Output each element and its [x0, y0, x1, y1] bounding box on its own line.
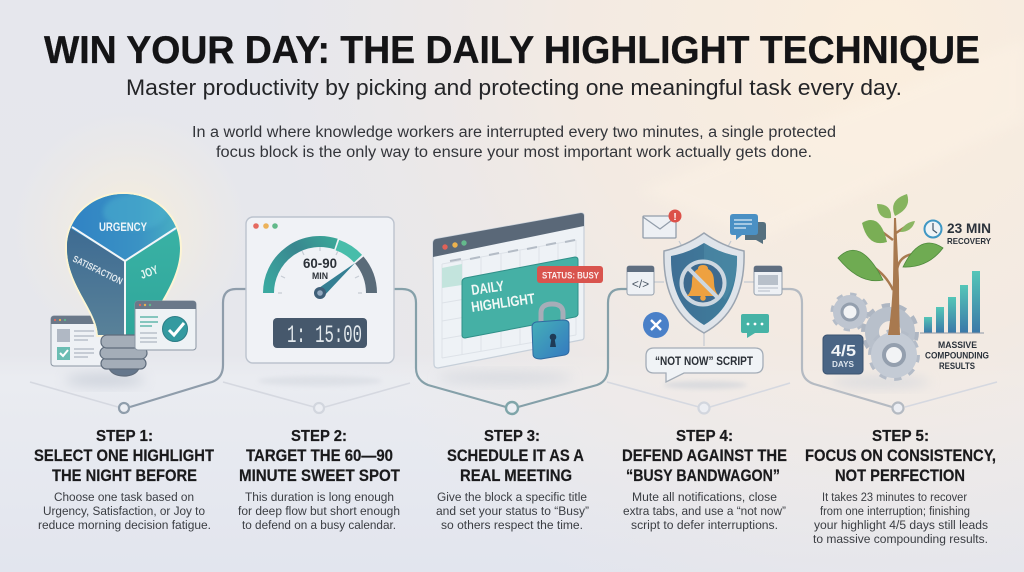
step 5 text: your highlight 4/5 days still leads: [814, 518, 988, 532]
subtitle: Master productivity by picking and protecting one meaningful task every day.: [126, 75, 902, 100]
label: urgency: URGENCY: [99, 220, 147, 234]
step 1 text: reduce morning decision fatigue.: [38, 518, 211, 532]
intro text: focus block is the only way to ensure your most important work actually gets done.: [216, 144, 812, 161]
timeline connector: [30, 289, 997, 414]
envelope: !: [673, 212, 677, 223]
illustration: growth: [823, 194, 991, 388]
label: joy: JOY: [138, 263, 160, 282]
gears: [833, 295, 917, 378]
step 3 text: Give the block a specific title: [437, 490, 587, 504]
step 5 text: FOCUS ON CONSISTENCY,: [805, 447, 996, 465]
step 5 text: It takes 23 minutes to recover: [822, 490, 967, 504]
recovery clock: 23 MIN: [947, 220, 991, 236]
step 3 text: and set your status to “Busy”: [436, 504, 589, 518]
step 1 text: SELECT ONE HIGHLIGHT: [34, 447, 214, 465]
step 4 text: DEFEND AGAINST THE: [622, 447, 787, 465]
gauge unit: MIN: [312, 271, 328, 281]
step 3 text: SCHEDULE IT AS A: [447, 447, 584, 465]
plant: [838, 194, 943, 335]
teal chat bubble: [741, 314, 769, 338]
step 1 text: THE NIGHT BEFORE: [52, 467, 197, 485]
step 2 text: TARGET THE 60—90: [246, 447, 393, 465]
step 5 text: from one interruption; finishing: [820, 504, 970, 518]
compounding label: [925, 340, 989, 371]
step 3 text: STEP 3:: [484, 428, 540, 445]
days badge: [823, 335, 863, 374]
illustration: shield and distractions: [627, 210, 782, 389]
step 2 text: This duration is long enough: [245, 490, 394, 504]
bar chart: [920, 271, 984, 333]
illustration: lightbulb: [51, 185, 196, 386]
step 1 text: [34, 428, 214, 532]
chat bubbles: [730, 214, 766, 244]
browser window: [754, 266, 782, 295]
not now script callout: [646, 348, 763, 382]
status badge: STATUS: BUSY: [542, 270, 600, 282]
node 4: [698, 402, 710, 414]
calendar grid: [442, 240, 576, 358]
step 3 text: so others respect the time.: [441, 518, 583, 532]
step 2 text: to defend on a busy calendar.: [242, 518, 396, 532]
step 2 text: STEP 2:: [291, 428, 347, 445]
days badge: 4/5: [831, 343, 856, 360]
step 4 text: [622, 428, 787, 532]
left window: [51, 316, 111, 366]
bulb base: [100, 335, 147, 376]
compounding label: MASSIVE: [938, 340, 977, 350]
compounding label: RESULTS: [939, 361, 975, 371]
gauge label: 60-90: [303, 255, 337, 271]
step 4 text: STEP 4:: [676, 428, 733, 445]
step 2 text: MINUTE SWEET SPOT: [239, 467, 400, 485]
bell icon: [687, 265, 719, 296]
intro text: In a world where knowledge workers are interrupted every two minutes, a single protected: [192, 124, 836, 141]
step 1 text: Urgency, Satisfaction, or Joy to: [43, 504, 205, 518]
padlock: [532, 304, 569, 359]
step 3 text: [436, 428, 589, 532]
daily highlight block: [462, 257, 578, 338]
node 1: [119, 403, 129, 413]
step 4 text: extra tabs, and use a “not now”: [623, 504, 786, 518]
step 3 text: REAL MEETING: [460, 467, 572, 485]
title: WIN YOUR DAY: THE DAILY HIGHLIGHT TECHNIQUE: [44, 29, 980, 72]
step 4 text: “BUSY BANDWAGON”: [626, 467, 780, 485]
node 3: [506, 402, 518, 414]
illustration: calendar: [433, 213, 603, 384]
envelope: [643, 210, 682, 238]
daily highlight block: DAILY: [470, 278, 505, 299]
step 2 text: [238, 428, 400, 532]
dismiss icon: [643, 312, 669, 338]
recovery clock: [924, 220, 991, 246]
illustration: timer card: [246, 217, 394, 386]
code window: [627, 266, 654, 295]
step 4 text: script to defer interruptions.: [631, 518, 778, 532]
code window: </>: [632, 277, 649, 291]
step 2 text: for deep flow but short enough: [238, 504, 400, 518]
compounding label: COMPOUNDING: [925, 350, 989, 360]
gauge: [268, 241, 372, 299]
digital timer: [273, 318, 367, 350]
step 5 text: [805, 428, 996, 546]
shield: [664, 233, 744, 333]
step 5 text: STEP 5:: [872, 428, 929, 445]
node 2: [314, 403, 324, 413]
intro text: [192, 124, 836, 161]
right window: [135, 301, 196, 350]
step 1 text: Choose one task based on: [54, 490, 194, 504]
days badge: DAYS: [832, 360, 855, 369]
step 4 text: Mute all notifications, close: [632, 490, 777, 504]
recovery clock: RECOVERY: [947, 236, 991, 246]
daily highlight block: HIGHLIGHT: [470, 291, 536, 316]
not now script callout: “NOT NOW” SCRIPT: [655, 356, 753, 368]
step 5 text: to massive compounding results.: [813, 532, 988, 546]
status badge: [537, 266, 603, 283]
node 5: [892, 402, 904, 414]
digital timer: 1: 15:00: [287, 321, 362, 350]
step 5 text: NOT PERFECTION: [835, 467, 965, 485]
label: satisfaction: SATISFACTION: [71, 254, 124, 287]
step 1 text: STEP 1:: [96, 428, 153, 445]
